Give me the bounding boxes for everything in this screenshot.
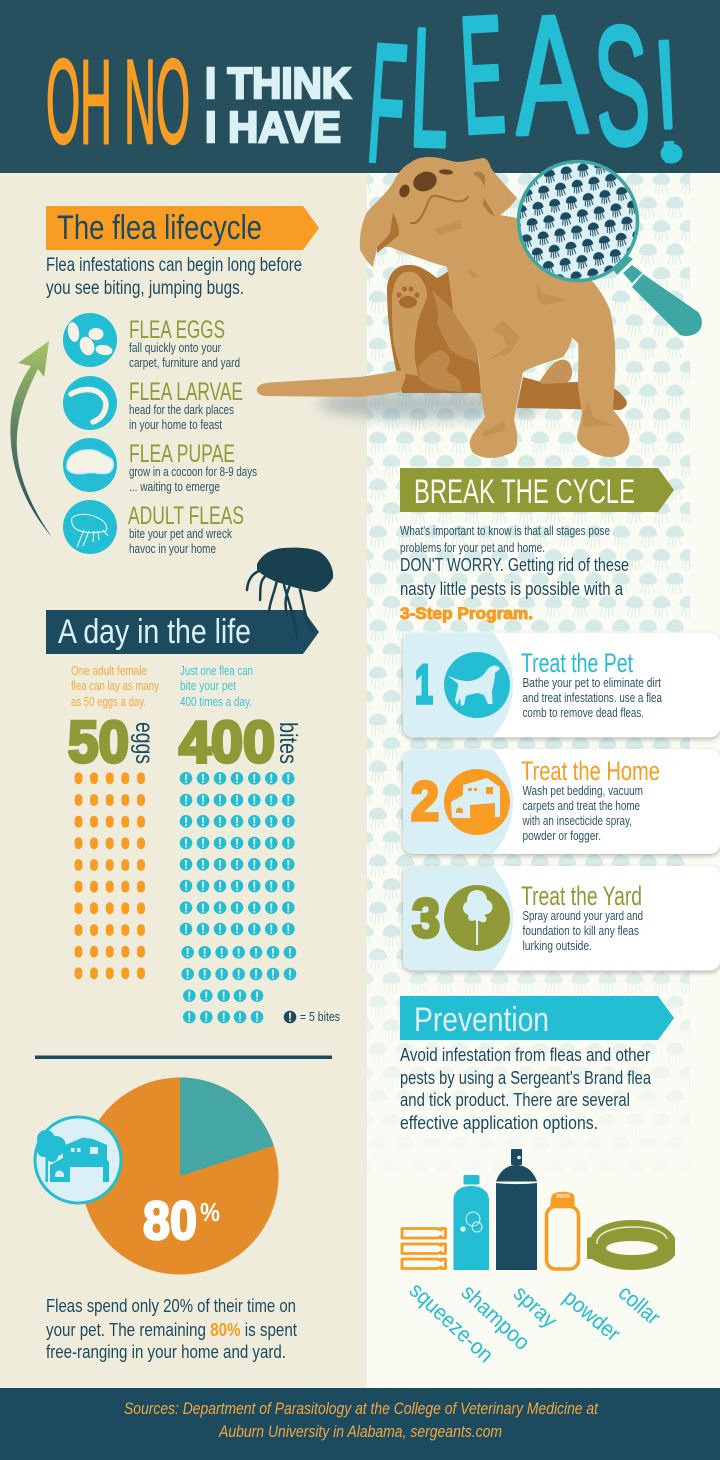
label: FLEA LARVAE: [129, 378, 243, 406]
step card 2: [403, 749, 720, 854]
icon: home and tree badge: [35, 1117, 121, 1203]
title: fleas: [362, 0, 684, 198]
label: ADULT FLEAS: [128, 502, 244, 530]
illustration: scratching dog: [257, 157, 629, 458]
banner: break the cycle: [400, 468, 674, 512]
paw leg: [392, 272, 427, 376]
intro text: you see biting, jumping bugs.: [46, 278, 244, 299]
description: carpets and treat the home: [522, 798, 640, 813]
outstretched foot: [257, 370, 406, 397]
pictogram: 400 bites: !!!!!!!: [184, 771, 290, 786]
pictogram: 400 bites: !!!!!!!: [186, 967, 292, 982]
body and head: [360, 157, 629, 458]
thigh lower highlight: [418, 350, 462, 392]
card background: [403, 866, 720, 970]
header band: [0, 0, 720, 173]
magnifying glass: [518, 161, 702, 336]
right ear marks: [474, 172, 495, 216]
arrow: lifecycle direction: [10, 341, 52, 537]
description: foundation to kill any fleas: [522, 923, 639, 938]
panel: the flea lifecycle: [10, 206, 319, 556]
blue lobe: [403, 749, 513, 854]
divider: [35, 1056, 332, 1059]
ear patch: [377, 213, 399, 253]
pictogram: 400 bites: !!!!!!!: [184, 836, 290, 851]
stage: flea pupae: [63, 438, 257, 494]
description: [522, 908, 643, 953]
outer thigh: [387, 265, 482, 393]
stage: flea eggs: [63, 313, 240, 370]
description: comb to remove dead fleas.: [522, 705, 644, 720]
text: bites fact: [180, 663, 253, 709]
icon: shampoo bottle: [454, 1175, 489, 1270]
magnified fleas: [518, 161, 638, 281]
description: ... waiting to emerge: [129, 479, 220, 494]
number: 400: 400: [179, 710, 275, 775]
stage: adult fleas: [63, 500, 244, 556]
description: [522, 675, 663, 720]
handle: [632, 274, 702, 336]
text: 3-step program: 3-Step Program.: [400, 604, 533, 623]
panel: break the cycle: [400, 468, 720, 970]
prevention text: pests by using a Sergeant's Brand flea: [400, 1068, 652, 1088]
title: [46, 0, 684, 198]
pictogram: 400 bites: !!!!!!!: [184, 879, 290, 894]
hind paw: [540, 360, 572, 384]
labels: product names: spray: [509, 1280, 562, 1333]
icon: eggs: [63, 313, 117, 367]
pictogram: 400 bites: !!!!!!!: [184, 857, 290, 872]
prevention text: [400, 1045, 652, 1133]
footer sources: [124, 1399, 599, 1441]
rear leg: [517, 377, 627, 410]
panel: prevention: [400, 996, 675, 1367]
fur shading: [433, 220, 613, 437]
text: eggs fact: [71, 663, 159, 709]
description: Bathe your pet to eliminate dirt: [522, 675, 661, 690]
eye right: [439, 169, 453, 175]
page background right: [367, 173, 720, 1388]
title: fleas: !: [650, 5, 684, 198]
number 3: 3: [412, 887, 440, 949]
intro small text: [400, 523, 610, 555]
icon: powder bottle: [546, 1192, 578, 1269]
stat: 80 percent: %: [200, 1197, 220, 1227]
footer sources: Sources: Department of Parasitology at the College of Veterinary Medicine at: [124, 1399, 599, 1418]
prevention text: effective application options.: [400, 1113, 598, 1133]
pie chart: [82, 1078, 278, 1274]
stage: flea larvae: [63, 376, 243, 432]
footer sources: Auburn University in Alabama, sergeants.com: [218, 1422, 502, 1441]
lens: [518, 162, 638, 280]
pictogram: 400 bites: !!!!!!!: [184, 793, 290, 808]
icon: adult flea: [63, 500, 117, 554]
text: bites fact: bite your pet: [180, 678, 236, 693]
handle neck: [623, 265, 642, 283]
description: Spray around your yard and: [522, 908, 643, 923]
jellyfish flea pattern: [367, 173, 690, 1175]
description: in your home to feast: [129, 417, 222, 432]
text: eggs fact: One adult female: [71, 663, 147, 678]
description: with an insecticide spray,: [522, 813, 632, 828]
pictogram: 400 bites: !!!!!!!: [184, 814, 290, 829]
prevention text: and tick product. There are several: [400, 1090, 630, 1110]
intro small text: What's important to know is that all stages pose: [400, 523, 610, 538]
heading: break the cycle: BREAK THE CYCLE: [414, 473, 635, 511]
description: Wash pet bedding, vacuum: [522, 783, 643, 798]
heading: treat the pet: Treat the Pet: [521, 648, 633, 678]
heading: treat the yard: Treat the Yard: [521, 881, 642, 911]
intro small text: problems for your pet and home.: [400, 540, 545, 555]
heading: a day in the life: A day in the life: [58, 613, 251, 651]
description: [129, 340, 240, 370]
step card 1: [403, 633, 720, 737]
description: [522, 783, 643, 843]
eye left: [398, 183, 411, 199]
label: FLEA PUPAE: [129, 440, 235, 468]
card background: [403, 633, 720, 737]
labels: product names: powder: [559, 1285, 625, 1346]
banner: day in the life: [46, 610, 319, 654]
dog shadow: [318, 389, 542, 419]
thigh highlight: [432, 290, 477, 363]
pictogram: 400 bites: [184, 771, 292, 1025]
description: [129, 526, 232, 556]
text: eggs fact: as 50 eggs a day.: [71, 694, 146, 709]
description: havoc in your home: [129, 541, 216, 556]
caption: [46, 1296, 297, 1362]
description: fall quickly onto your: [129, 340, 222, 355]
pictogram: 400 bites: !!!!!: [187, 988, 259, 1003]
caption: free-ranging in your home and yard.: [46, 1342, 286, 1362]
blue lobe: [403, 866, 513, 970]
number 2: 2: [411, 770, 439, 832]
caption: your pet. The remaining 80% is spent: [46, 1320, 297, 1340]
mouth: [411, 196, 468, 223]
icon: flea collar: [587, 1220, 675, 1270]
labels: product names: shampoo: [457, 1279, 535, 1355]
legend: 5 bites: [284, 1009, 340, 1025]
step card 3: [403, 866, 720, 970]
description: bite your pet and wreck: [129, 526, 232, 541]
labels: product names: collar: [614, 1280, 666, 1330]
icon: tree: [444, 885, 510, 951]
blue lobe: [403, 633, 513, 737]
intro text: [46, 255, 302, 299]
foot shadow: [402, 378, 435, 392]
text: bites fact: 400 times a day.: [180, 694, 252, 709]
intro text: Flea infestations can begin long before: [46, 255, 302, 276]
paw print: [396, 286, 420, 308]
heading: the flea lifecycle: The flea lifecycle: [57, 209, 262, 247]
heading: prevention: Prevention: [414, 1001, 549, 1039]
panel: a day in the life: [46, 548, 340, 1025]
title: OH NO: [46, 35, 190, 169]
labels: product names: squeeze-on: [405, 1277, 498, 1367]
description: carpet, furniture and yard: [129, 355, 240, 370]
icon: larva: [63, 376, 117, 430]
title: fleas: F: [362, 8, 412, 198]
unit: eggs: eggs: [130, 722, 158, 764]
icon: house: [444, 769, 510, 835]
legend: 5 bites: = 5 bites: [300, 1009, 340, 1024]
description: [129, 402, 234, 432]
text: eggs fact: flea can lay as many: [71, 678, 159, 693]
pictogram: 400 bites: !!!!!: [187, 1010, 259, 1025]
description: powder or fogger.: [522, 828, 601, 843]
icon: spray can: [496, 1149, 537, 1270]
title: i have: I HAVE: [205, 103, 341, 152]
icon: squeeze-on tubes: [402, 1228, 446, 1268]
number 1: 1: [415, 653, 433, 715]
lens connector: [612, 256, 633, 275]
description: [129, 464, 257, 494]
stat: 80 percent: 80: [143, 1191, 197, 1251]
banner: prevention: [400, 996, 674, 1040]
description: grow in a cocoon for 8-9 days: [129, 464, 257, 479]
description: lurking outside.: [522, 938, 592, 953]
nose: [410, 168, 440, 195]
pictogram: 400 bites: !!!!!!!: [184, 922, 290, 937]
pictogram: 400 bites: !!!!!!!: [184, 900, 290, 915]
icon: pupa: [63, 438, 117, 492]
icon: flea silhouette: [247, 548, 333, 637]
heading: treat the home: Treat the Home: [521, 756, 660, 786]
card background: [403, 749, 720, 854]
intro large text: nasty little pests is possible with a: [400, 579, 624, 599]
lens rim: [518, 162, 638, 280]
prevention text: Avoid infestation from fleas and other: [400, 1045, 650, 1065]
panel: 80 percent: [35, 1078, 297, 1362]
icon: dog: [444, 652, 510, 718]
banner: lifecycle: [46, 206, 319, 250]
text: bites fact: Just one flea can: [180, 663, 253, 678]
unit: bites: bites: [274, 722, 302, 764]
pictogram: 50 eggs: [78, 776, 141, 975]
intro large text: [400, 555, 629, 599]
title: i think: I THINK: [205, 59, 351, 108]
caption: Fleas spend only 20% of their time on: [46, 1296, 296, 1316]
description: and treat infestations. use a flea: [522, 690, 663, 705]
label: FLEA EGGS: [129, 316, 225, 344]
number: 50: 50: [68, 710, 129, 775]
labels: product names: [405, 1277, 666, 1367]
footer band: [0, 1388, 720, 1460]
title: exclamation dot: [660, 144, 682, 164]
description: head for the dark places: [129, 402, 234, 417]
page background left: [0, 173, 367, 1388]
intro large text: DON'T WORRY. Getting rid of these: [400, 555, 629, 575]
pictogram: 400 bites: !!!!!!!: [186, 945, 292, 960]
legend: 5 bites: !: [288, 1010, 292, 1025]
